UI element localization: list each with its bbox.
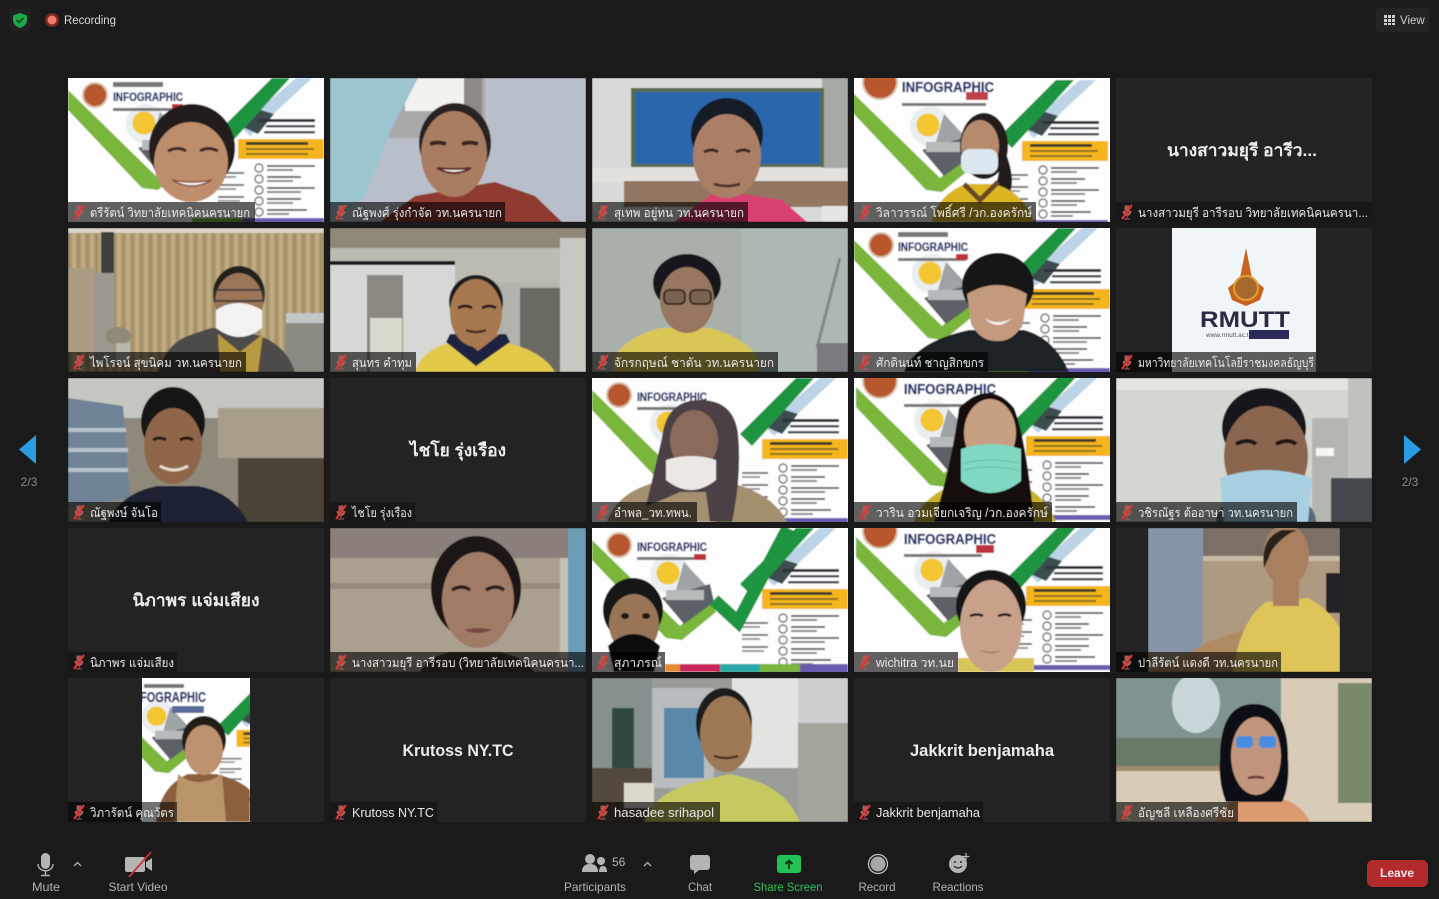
start video button: Start Video bbox=[108, 880, 168, 894]
recording indicator bbox=[45, 13, 116, 27]
reactions button: Reactions bbox=[932, 880, 984, 894]
participant name: นางสาวมยุรี อารีว... bbox=[1167, 140, 1317, 161]
name label bbox=[854, 202, 1036, 222]
tile: row 1 col 3 bbox=[592, 78, 848, 222]
name label: วิลาวรรณ์ โพธิ์ศรี /วก.องครักษ์ bbox=[876, 203, 1032, 220]
name label bbox=[592, 802, 720, 822]
tile: row 4 col 1 bbox=[68, 528, 324, 672]
name label bbox=[854, 652, 958, 672]
name label: มหาวิทยาลัยเทคโนโลยีราชมงคลธัญบุรี bbox=[1138, 355, 1314, 371]
leave button: Leave bbox=[1380, 866, 1414, 880]
name label: ปาลีรัตน์ แดงดี วท.นครนายก bbox=[1138, 656, 1278, 670]
name label bbox=[592, 352, 778, 372]
name label bbox=[1116, 802, 1238, 822]
participant name: Krutoss NY.TC bbox=[402, 741, 514, 760]
name label: วิภารัตน์ คุณวัตร bbox=[90, 806, 174, 821]
tile: row 3 col 1 bbox=[68, 378, 324, 522]
tile: row 2 col 2 bbox=[330, 228, 586, 372]
name label: อัญชลี เหลืองศรีชัย bbox=[1138, 806, 1234, 820]
name label bbox=[1116, 202, 1372, 222]
mute button bbox=[32, 853, 81, 894]
name label: Krutoss NY.TC bbox=[352, 806, 434, 820]
participant name: นิภาพร แจ่มเสียง bbox=[132, 590, 260, 610]
RMUTT logo image bbox=[1172, 228, 1316, 372]
tile: row 5 col 5 bbox=[1116, 673, 1372, 822]
share screen button bbox=[754, 855, 822, 894]
name label: ไพโรจน์ สุขนิคม วท.นครนายก bbox=[89, 355, 242, 371]
participant name: Jakkrit benjamaha bbox=[910, 741, 1055, 760]
share screen button: Share Screen bbox=[754, 880, 822, 894]
tile: row 1 col 1 bbox=[68, 78, 324, 222]
name label: นิภาพร แจ่มเสียง bbox=[90, 656, 174, 670]
arrow: next page: 2/3 bbox=[1402, 475, 1419, 489]
tile: row 3 col 2 bbox=[330, 378, 586, 522]
name label: นางสาวมยุรี อารีรอบ วิทยาลัยเทคนิคนครนา... bbox=[1138, 206, 1368, 221]
name label: สุภาภรณ์ bbox=[614, 656, 662, 671]
tile: row 4 col 2 bbox=[330, 528, 586, 672]
participant name: ไชโย รุ่งเรือง bbox=[408, 440, 506, 461]
tile: row 5 col 1 bbox=[41, 644, 381, 848]
name label bbox=[68, 652, 177, 672]
name label: ศักดินนท์ ชาญสิกขกร bbox=[876, 356, 984, 370]
name label: ณัฐพงษ์ จันโอ bbox=[90, 505, 158, 520]
tile: row 5 col 2 bbox=[330, 678, 586, 822]
tile: row 4 col 5 bbox=[1116, 524, 1372, 672]
tile: row 1 col 4 bbox=[854, 78, 1110, 222]
participants button: 56 bbox=[612, 855, 626, 869]
name label: hasadee srihapol bbox=[614, 806, 714, 820]
name label: ณัฐพงศ์ รุ่งกำจัด วท.นครนายก bbox=[352, 206, 502, 221]
name label bbox=[1116, 352, 1316, 372]
name label: wichitra วท.นย bbox=[875, 656, 954, 670]
name label bbox=[854, 502, 1052, 522]
arrow: previous page bbox=[19, 435, 38, 489]
tile: row 2 col 5 bbox=[1116, 228, 1372, 372]
tile: row 3 col 3: INFOGRAPHIC bbox=[637, 390, 707, 404]
bottom toolbar bbox=[32, 852, 1428, 894]
RMUTT logo image: www.rmutt.ac.th bbox=[1205, 332, 1253, 339]
name label bbox=[330, 202, 505, 222]
record button bbox=[858, 854, 896, 894]
chat button: Chat bbox=[688, 880, 713, 894]
name label: สุนทร คำทุม bbox=[352, 356, 412, 371]
tile: row 3 col 4: INFOGRAPHIC bbox=[904, 381, 996, 398]
name label bbox=[854, 802, 983, 822]
tile: row 2 col 1 bbox=[68, 228, 324, 372]
start video button bbox=[108, 852, 168, 894]
view button bbox=[1376, 8, 1430, 32]
name label: สุเทพ อยู่ทน วท.นครนายก bbox=[614, 206, 744, 221]
tile: row 3 col 4 bbox=[854, 378, 1110, 522]
record button: Record bbox=[858, 880, 896, 894]
tile: row 1 col 5 bbox=[1116, 78, 1372, 222]
tile: row 3 col 5 bbox=[1116, 378, 1372, 522]
icon: security shield bbox=[9, 9, 31, 31]
tile: row 4 col 3 bbox=[592, 528, 848, 672]
tile: row 3 col 3 bbox=[592, 378, 848, 522]
name label bbox=[68, 502, 161, 522]
participants button: Participants bbox=[564, 880, 626, 894]
tile: row 2 col 4: INFOGRAPHIC bbox=[898, 240, 968, 254]
name label bbox=[330, 502, 415, 522]
tile: row 1 col 2 bbox=[330, 78, 586, 222]
name label: วชิรณัฐร ต้ออาษา วท.นครนายก bbox=[1138, 506, 1293, 520]
tile: row 5 col 3 bbox=[592, 678, 848, 822]
name label bbox=[592, 502, 697, 522]
chat button bbox=[688, 855, 713, 894]
view button: View bbox=[1400, 15, 1425, 27]
participant video bbox=[1148, 524, 1340, 672]
leave button bbox=[1367, 860, 1428, 887]
tile: row 1 col 4: INFOGRAPHIC bbox=[902, 79, 994, 96]
tile: row 4 col 4 bbox=[796, 485, 1196, 725]
participants button bbox=[564, 854, 651, 894]
name label: อำพล_วท.ทพน. bbox=[614, 506, 692, 520]
reactions button bbox=[932, 853, 984, 894]
recording indicator: Recording bbox=[64, 15, 116, 27]
RMUTT logo image: RMUTT bbox=[1200, 307, 1291, 332]
participant video bbox=[41, 644, 381, 848]
name label: จักรกฤษณ์ ชาตัน วท.นครนายก bbox=[614, 356, 774, 370]
name label bbox=[330, 652, 586, 672]
name label bbox=[592, 202, 748, 222]
arrow: next page bbox=[1402, 435, 1421, 489]
arrow: previous page: 2/3 bbox=[21, 475, 38, 489]
name label bbox=[1116, 652, 1281, 672]
name label: ตรีรัตน์ วิทยาลัยเทคนิคนครนายก bbox=[90, 206, 250, 220]
tile: row 4 col 4: INFOGRAPHIC bbox=[904, 531, 996, 548]
name label bbox=[592, 652, 665, 672]
name label bbox=[68, 202, 255, 222]
tile: row 2 col 4 bbox=[854, 228, 1110, 372]
name label bbox=[68, 802, 177, 822]
name label: นางสาวมยุรี อารีรอบ (วิทยาลัยเทคนิคนครนา... bbox=[352, 656, 584, 671]
mute button: Mute bbox=[32, 880, 60, 894]
name label: วาริน อวมเจียกเจริญ /วก.องครักษ์ bbox=[876, 506, 1048, 520]
tile: row 2 col 3 bbox=[592, 228, 848, 372]
name label bbox=[68, 352, 246, 372]
name label bbox=[854, 352, 988, 372]
tile: row 4 col 3: INFOGRAPHIC bbox=[637, 540, 707, 554]
top bar bbox=[9, 8, 1430, 32]
name label bbox=[1116, 502, 1297, 522]
name label bbox=[330, 802, 437, 822]
name label bbox=[330, 352, 416, 372]
tile: row 5 col 4 bbox=[854, 678, 1110, 822]
participant video: FOGRAPHIC bbox=[140, 689, 206, 706]
name label: Jakkrit benjamaha bbox=[876, 806, 980, 820]
name label: ไชโย รุ่งเรือง bbox=[351, 505, 412, 521]
tile: row 1 col 1: INFOGRAPHIC bbox=[113, 90, 183, 104]
